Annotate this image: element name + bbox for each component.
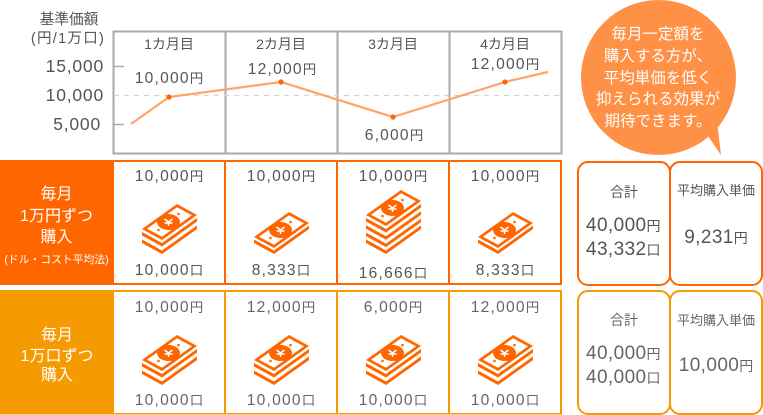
y axis labels: 5,000: [53, 114, 101, 134]
panel: row 2 average unit price: 平均購入単価: [677, 313, 755, 328]
row 1 amounts: 10,000円: [135, 168, 203, 185]
panel: row 1 total: 43,332口: [586, 239, 661, 260]
price labels: 12,000円: [248, 61, 316, 78]
icon: money stack month 1: [142, 204, 197, 254]
panel: row 1 total: [578, 162, 670, 285]
row 1 units: [135, 262, 534, 282]
panel: row 2 total: 40,000円: [586, 343, 661, 364]
icon: money stack month 3: [366, 190, 421, 254]
callout bubble: 期待できます。: [605, 112, 711, 130]
row 1 units: 16,666口: [359, 265, 427, 282]
row 1 amounts: 10,000円: [247, 168, 315, 185]
row 2 amounts: 12,000円: [247, 299, 315, 316]
row 2 units: 10,000口: [247, 392, 315, 409]
price labels: 6,000円: [365, 127, 423, 144]
row 2 amounts: 10,000円: [135, 299, 203, 316]
row 2 heading: 購入: [41, 366, 73, 384]
panel: row 2 total: 40,000口: [586, 367, 661, 388]
panel: row 1 fixed amount: [0, 160, 562, 285]
icon: money stack month 2: [254, 335, 309, 385]
icon: money stack month 3: [366, 335, 421, 385]
row 2 heading: 1万口ずつ: [21, 347, 93, 365]
row 1 heading: 購入: [40, 228, 73, 246]
icon: money stack month 2: [254, 212, 309, 254]
row 1 heading: 毎月: [40, 185, 73, 203]
price labels: [135, 56, 539, 144]
row 2 heading: [21, 326, 93, 384]
row 1 units: 8,333口: [476, 262, 534, 279]
row 2 amounts: 6,000円: [364, 299, 422, 316]
panel: row 2 average unit price: [670, 291, 762, 414]
callout bubble: 購入する方が、: [604, 47, 712, 65]
row 1 amounts: 10,000円: [359, 168, 427, 185]
axis title: 基準価額: [40, 11, 99, 28]
y axis labels: [46, 56, 104, 134]
month headers: 1カ月目: [144, 36, 194, 52]
y axis labels: 10,000: [46, 85, 104, 105]
month headers: [144, 36, 530, 52]
panel: row 1 total: 合計: [610, 184, 638, 200]
price points: [166, 79, 508, 120]
row 1 heading: (ドル・コスト平均法): [4, 252, 109, 266]
row 1 amounts: 10,000円: [471, 168, 539, 185]
callout bubble: 毎月一定額を: [611, 25, 705, 43]
line chart: [114, 31, 562, 154]
panel: row 1 average unit price: 平均購入単価: [677, 183, 755, 198]
panel: row 1 average unit price: 9,231円: [684, 227, 748, 248]
axis title: (円/1万口): [31, 31, 105, 47]
row 1 units: 10,000口: [135, 262, 203, 279]
callout bubble: 抑えられる効果が: [596, 90, 720, 108]
row 2 units: [135, 392, 539, 409]
panel: row 2 total: 合計: [610, 312, 638, 328]
price labels: 12,000円: [471, 56, 539, 73]
icon: money stack month 4: [478, 335, 533, 385]
month headers: 3カ月目: [368, 36, 418, 52]
panel: row 1 average unit price: [670, 162, 762, 285]
row 1 units: 8,333口: [252, 262, 310, 279]
price labels: 10,000円: [135, 70, 203, 87]
panel: row 2 fixed units: [0, 290, 562, 414]
icon: money stack month 4: [478, 212, 533, 254]
y axis labels: 15,000: [46, 56, 104, 76]
row 2 units: 10,000口: [359, 392, 427, 409]
callout bubble: 平均単価を低く: [604, 69, 712, 87]
row 2 amounts: [135, 299, 539, 316]
panel: row 2 average unit price: 10,000円: [679, 355, 753, 376]
row 1 heading: 1万円ずつ: [20, 207, 93, 225]
month headers: 4カ月目: [480, 36, 530, 52]
price line: [131, 72, 548, 124]
panel: row 2 total: [578, 291, 670, 414]
month headers: 2カ月目: [256, 36, 306, 52]
row 2 units: 10,000口: [135, 392, 203, 409]
axis title: [31, 11, 105, 47]
row 1 amounts: [135, 168, 539, 185]
row 1 heading: [4, 185, 109, 266]
row 2 amounts: 12,000円: [471, 299, 539, 316]
icon: money stack month 1: [142, 335, 197, 385]
panel: row 1 total: 40,000円: [586, 215, 661, 236]
row 2 units: 10,000口: [471, 392, 539, 409]
callout bubble: [581, 0, 736, 155]
row 2 heading: 毎月: [41, 326, 73, 344]
